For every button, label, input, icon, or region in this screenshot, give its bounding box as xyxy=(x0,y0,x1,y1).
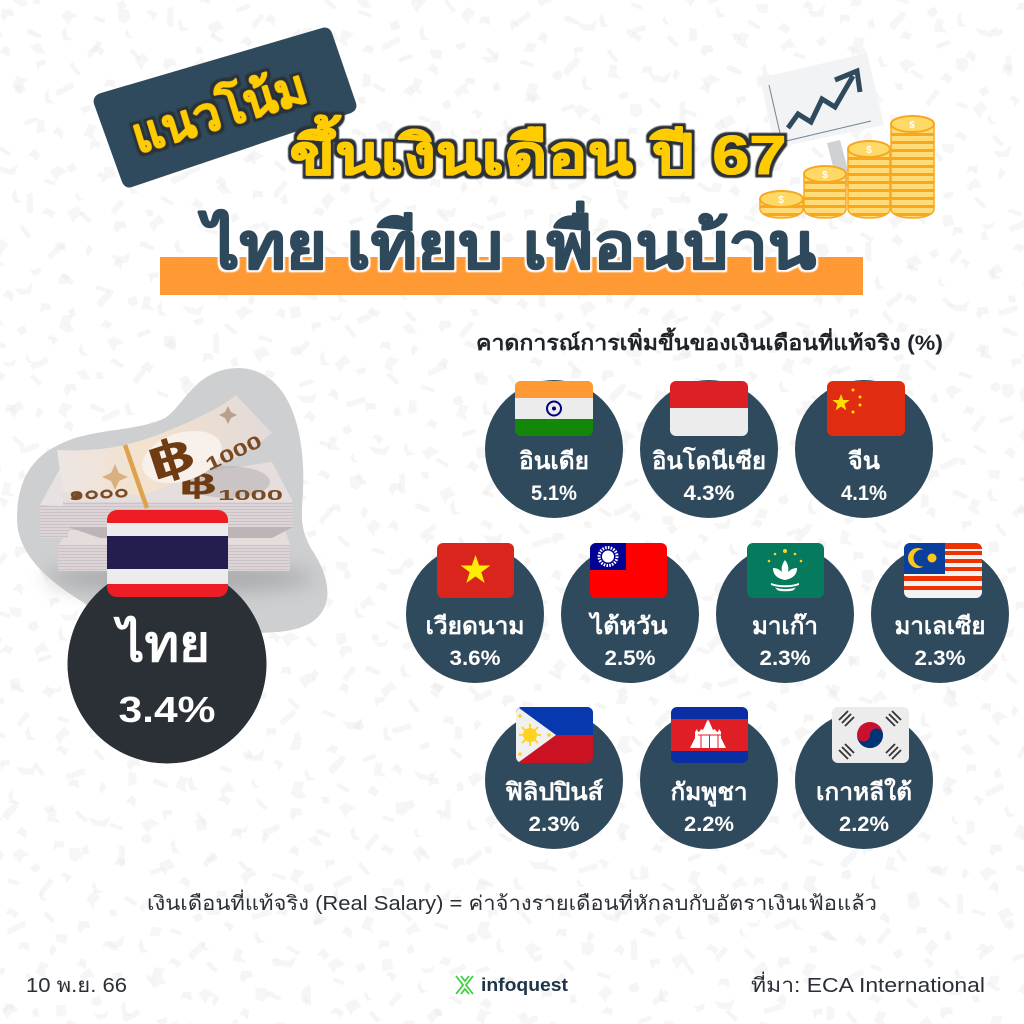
country: China: 4.1% xyxy=(841,482,887,505)
country: Vietnam: 3.6% xyxy=(450,647,501,670)
country: Indonesia: อินโดนีเซีย xyxy=(652,446,766,475)
coin stack 3: $ xyxy=(866,145,872,156)
country: China xyxy=(795,380,933,518)
title line: salary increase 67: ขึ้นเงินเดือน ปี 67 xyxy=(290,115,786,186)
coin stack 3 xyxy=(848,141,890,218)
country: Malaysia: มาเลเซีย xyxy=(894,613,986,640)
country: Taiwan: 2.5% xyxy=(604,647,656,670)
rising arrow xyxy=(788,76,853,128)
upper stack top xyxy=(63,462,293,505)
Thailand name: ไทย xyxy=(113,615,210,672)
orange highlight bar xyxy=(160,257,863,295)
country: Cambodia: กัมพูชา xyxy=(670,779,748,807)
flag: Malaysia xyxy=(904,543,982,598)
chart sign post xyxy=(827,140,852,186)
flag: Macau xyxy=(747,543,824,598)
illustration: banknote stacks: ฿ xyxy=(140,426,202,490)
definition note: เงินเดือนที่แท้จริง (Real Salary) = ค่าจ้างรายเดือนที่หักลบกับอัตราเงินเฟ้อแล้ว xyxy=(147,889,877,915)
country: Macau xyxy=(716,543,854,683)
illustration: banknote stacks: ๑๐๐๐ xyxy=(68,481,129,504)
country: South Korea: 2.2% xyxy=(839,813,889,836)
flag: Philippines xyxy=(516,707,593,763)
flag: Cambodia xyxy=(671,707,748,763)
country: Macau: มาเก๊า xyxy=(752,613,818,640)
chart sign board xyxy=(760,53,884,148)
date: 10 พ.ย. 66 xyxy=(26,975,127,997)
country: Taiwan: ไต้หวัน xyxy=(587,611,668,640)
country: Philippines: ฟิลิปปินส์ xyxy=(505,778,603,806)
panel: Thailand xyxy=(17,368,327,764)
country: Cambodia: 2.2% xyxy=(684,813,734,836)
country: Macau: 2.3% xyxy=(760,647,811,670)
raised banknote xyxy=(57,395,272,495)
country: India: อินเดีย xyxy=(519,448,589,475)
title line: trend: แนวโน้ม xyxy=(125,58,313,164)
coin stack 1: $ xyxy=(778,195,784,206)
grey blob backdrop xyxy=(17,368,327,634)
country: India xyxy=(485,380,623,518)
illustration: banknote stacks xyxy=(40,395,315,592)
flag: Vietnam xyxy=(437,543,514,598)
denomination labels: 1000 xyxy=(218,487,283,504)
flag: China xyxy=(827,381,905,436)
flag: Indonesia xyxy=(670,381,748,436)
title tag panel xyxy=(94,28,356,187)
coin stack 2: $ xyxy=(822,170,828,181)
country: Philippines xyxy=(485,707,623,849)
illustration: banknote stacks: 1000 xyxy=(202,431,265,475)
infoquest logo: infoquest xyxy=(481,975,568,995)
flag: Taiwan xyxy=(590,543,667,598)
Thailand value: 3.4% xyxy=(118,689,216,730)
coin stack 2 xyxy=(804,166,846,218)
flag: South Korea xyxy=(832,707,909,763)
country: Philippines: 2.3% xyxy=(528,813,580,836)
back left stack xyxy=(40,463,120,508)
country: South Korea: เกาหลีใต้ xyxy=(816,777,912,806)
flag: Thailand xyxy=(107,510,228,597)
illustration: rising chart sign and coin stacks xyxy=(760,53,934,218)
country: Vietnam xyxy=(406,543,544,683)
flag: India xyxy=(515,381,593,436)
source: ที่มา: ECA International xyxy=(751,971,985,997)
country: Malaysia: 2.3% xyxy=(914,647,966,670)
coin stack 4 xyxy=(891,116,934,218)
title block xyxy=(94,28,863,295)
country: South Korea xyxy=(795,707,933,849)
chart heading: คาดการณ์การเพิ่มขึ้นของเงินเดือนที่แท้จริง (%) xyxy=(476,327,943,355)
lower stack xyxy=(58,530,290,545)
country: India: 5.1% xyxy=(531,482,577,505)
Thailand circle xyxy=(68,564,266,764)
coin stack 4: $ xyxy=(909,120,915,131)
title line: Thailand vs neighbours: ไทย เทียบ เพื่อนบ้าน xyxy=(197,201,816,282)
country: Cambodia xyxy=(640,707,778,849)
baht sign under note: ฿ xyxy=(178,465,218,501)
country: Malaysia xyxy=(871,543,1009,683)
country: Vietnam: เวียดนาม xyxy=(426,613,524,640)
country: Indonesia: 4.3% xyxy=(684,482,735,505)
country: China: จีน xyxy=(848,448,881,475)
country: Taiwan xyxy=(561,543,699,683)
coin stack 1 xyxy=(760,191,803,218)
country: Indonesia xyxy=(640,380,778,518)
